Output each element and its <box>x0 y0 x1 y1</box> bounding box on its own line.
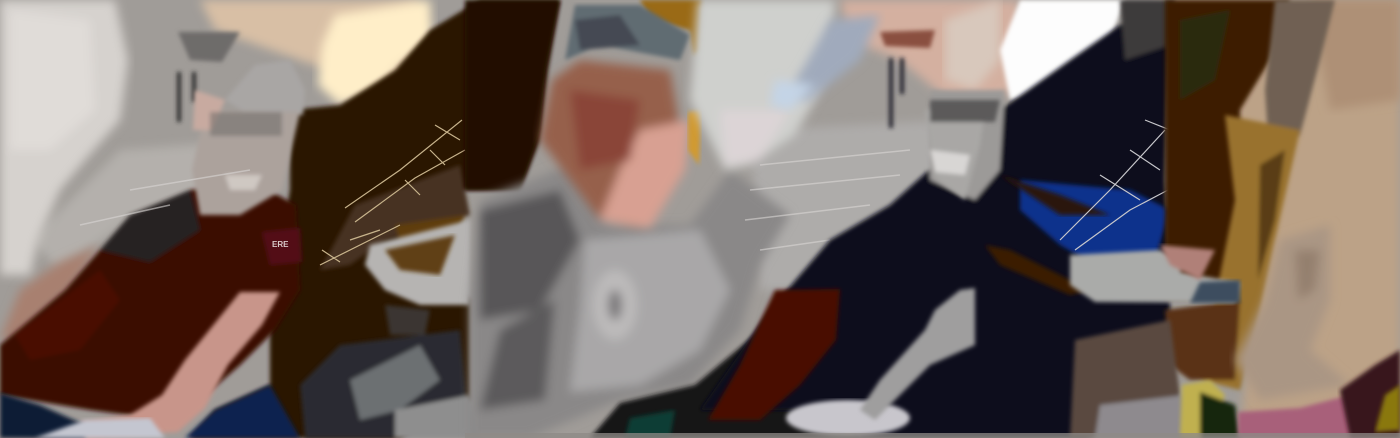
blue-grey fabric: centre <box>770 15 880 110</box>
person: maroon jacket left <box>0 180 302 420</box>
glass and table items: lower left-centre <box>300 305 480 438</box>
text on maroon jacket: ERE <box>272 240 289 249</box>
embroidery line details: right <box>1060 120 1170 250</box>
grey forearm: lower right of centre <box>860 288 975 420</box>
bottom edge strip <box>465 433 1400 438</box>
person: centre face <box>540 60 690 228</box>
skin hand: right wall <box>1235 225 1350 400</box>
dark maroon flowers: bottom right <box>1340 350 1400 438</box>
person: centre grey shirt <box>470 165 790 438</box>
bright-blue panel: right <box>1020 180 1170 268</box>
brown wood: between figures <box>465 0 560 190</box>
white fur: centre <box>690 0 835 170</box>
gold-patterned embroidery: centre left <box>320 165 470 270</box>
dark-green object: lower centre <box>625 410 675 438</box>
hanging fronds: right <box>1165 0 1335 390</box>
orange stripe: top centre <box>640 0 702 55</box>
bright window: left <box>318 0 432 105</box>
pink cloth: bottom right <box>1238 395 1370 438</box>
person: right face highlight <box>925 100 1000 200</box>
person: left face and grey hair <box>192 60 305 215</box>
orange stripe: centre <box>688 110 701 165</box>
white fur: left <box>0 0 128 275</box>
person: dark brown jacket left <box>190 0 560 438</box>
wood grain lines: centre <box>80 150 910 250</box>
person: left forearm <box>80 292 280 438</box>
yellow flowers and green leaves: bottom right <box>1180 380 1240 438</box>
white window: right <box>1000 0 1125 100</box>
carved wood ornament and handles <box>177 30 935 128</box>
table items: lower right <box>1070 320 1185 438</box>
brown strap: right <box>985 245 1090 295</box>
embroidery line details: left <box>320 120 465 265</box>
white plate: lower centre <box>786 400 910 436</box>
person: right dark jacket <box>700 0 1175 438</box>
serving plate: right <box>1070 250 1240 303</box>
plate: left <box>365 220 470 305</box>
maroon sleeve panel: centre <box>708 289 840 420</box>
pale cloth: bottom left <box>35 418 165 438</box>
brown foliage and wood: right <box>1165 0 1290 300</box>
fern foliage: centre top <box>565 5 690 60</box>
dark table edge: lower centre <box>590 332 858 438</box>
navy clothing: bottom left <box>0 393 85 438</box>
